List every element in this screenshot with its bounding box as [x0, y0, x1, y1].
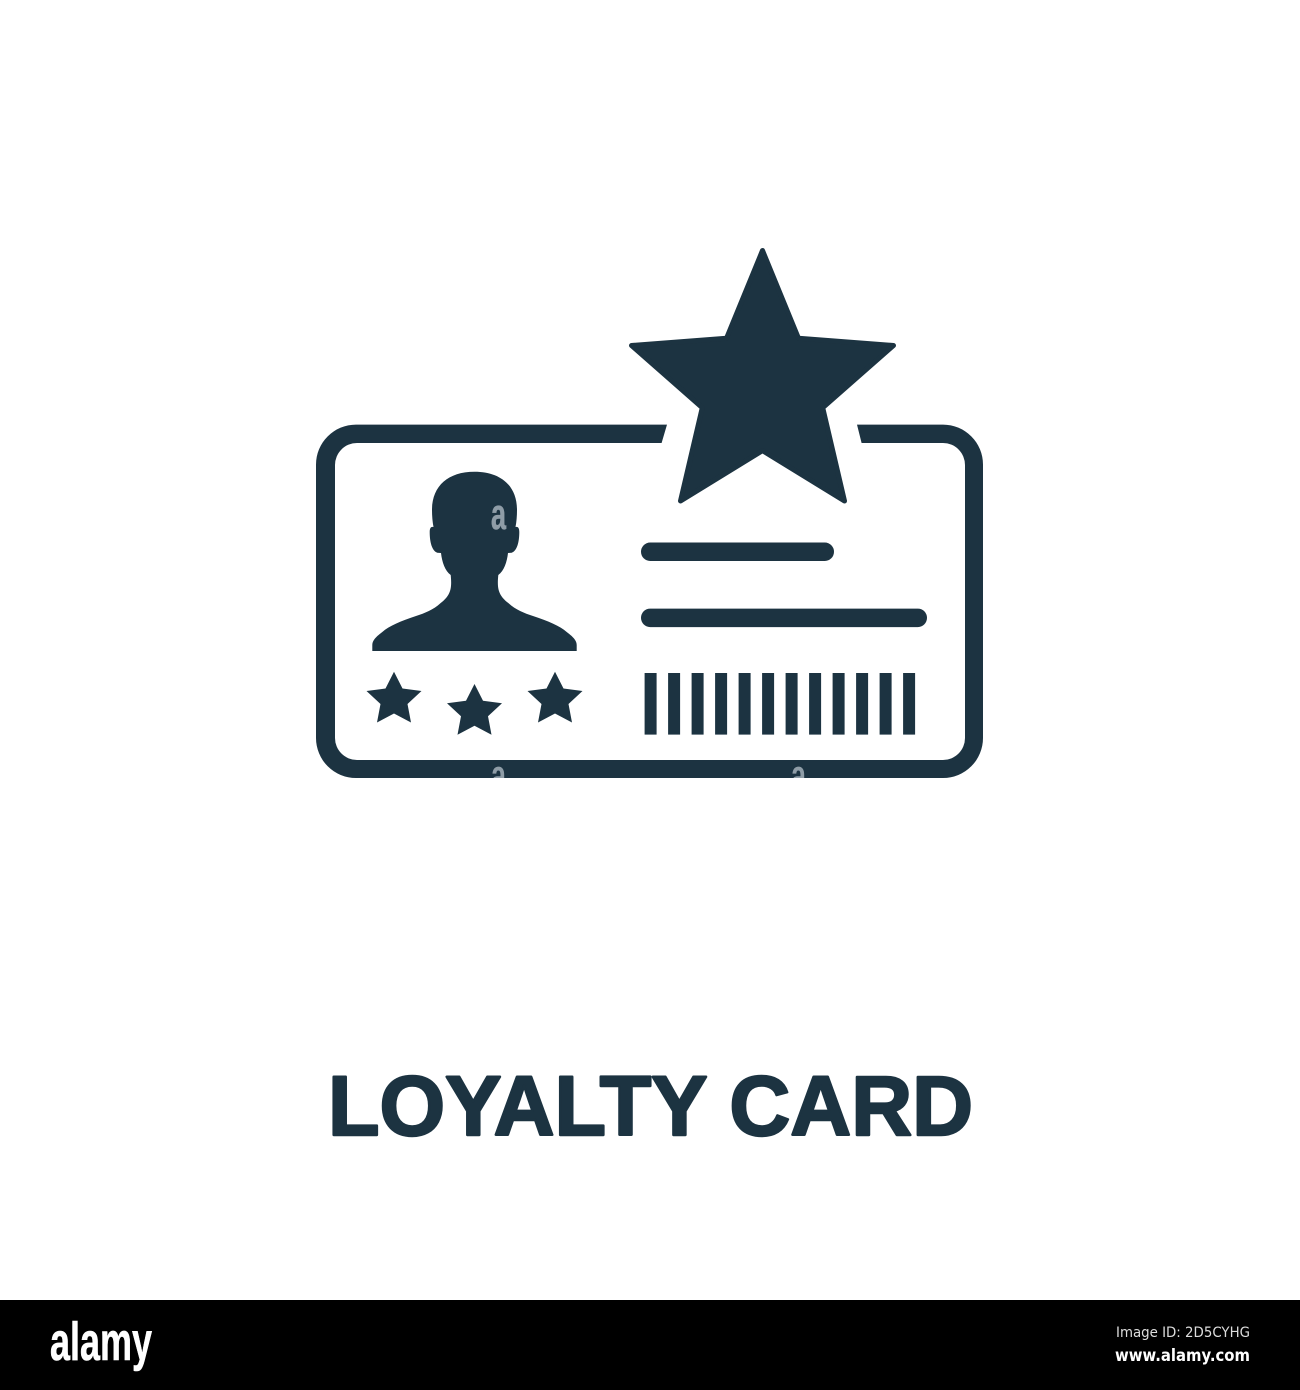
text line short — [641, 542, 834, 561]
website: www.alamy.com — [1115, 1346, 1250, 1365]
small star right — [528, 672, 582, 722]
large star — [632, 250, 894, 501]
watermark letters on card edge: a — [491, 751, 506, 800]
watermark letters on card edge — [492, 766, 804, 778]
image id: Image ID: 2D5CYHG — [1116, 1325, 1250, 1341]
footer bar — [0, 1300, 1300, 1390]
person silhouette — [372, 472, 577, 651]
icon: loyalty card — [316, 250, 983, 778]
title: LOYALTY CARD — [328, 1059, 973, 1153]
small star left — [366, 672, 422, 722]
alamy logo: alamy — [50, 1312, 152, 1372]
watermark letters on card edge: a — [791, 751, 806, 800]
small star middle — [447, 684, 502, 735]
barcode — [645, 673, 915, 735]
card outline — [316, 425, 983, 778]
text line long — [641, 609, 927, 627]
watermark letter on head: a — [491, 490, 506, 539]
